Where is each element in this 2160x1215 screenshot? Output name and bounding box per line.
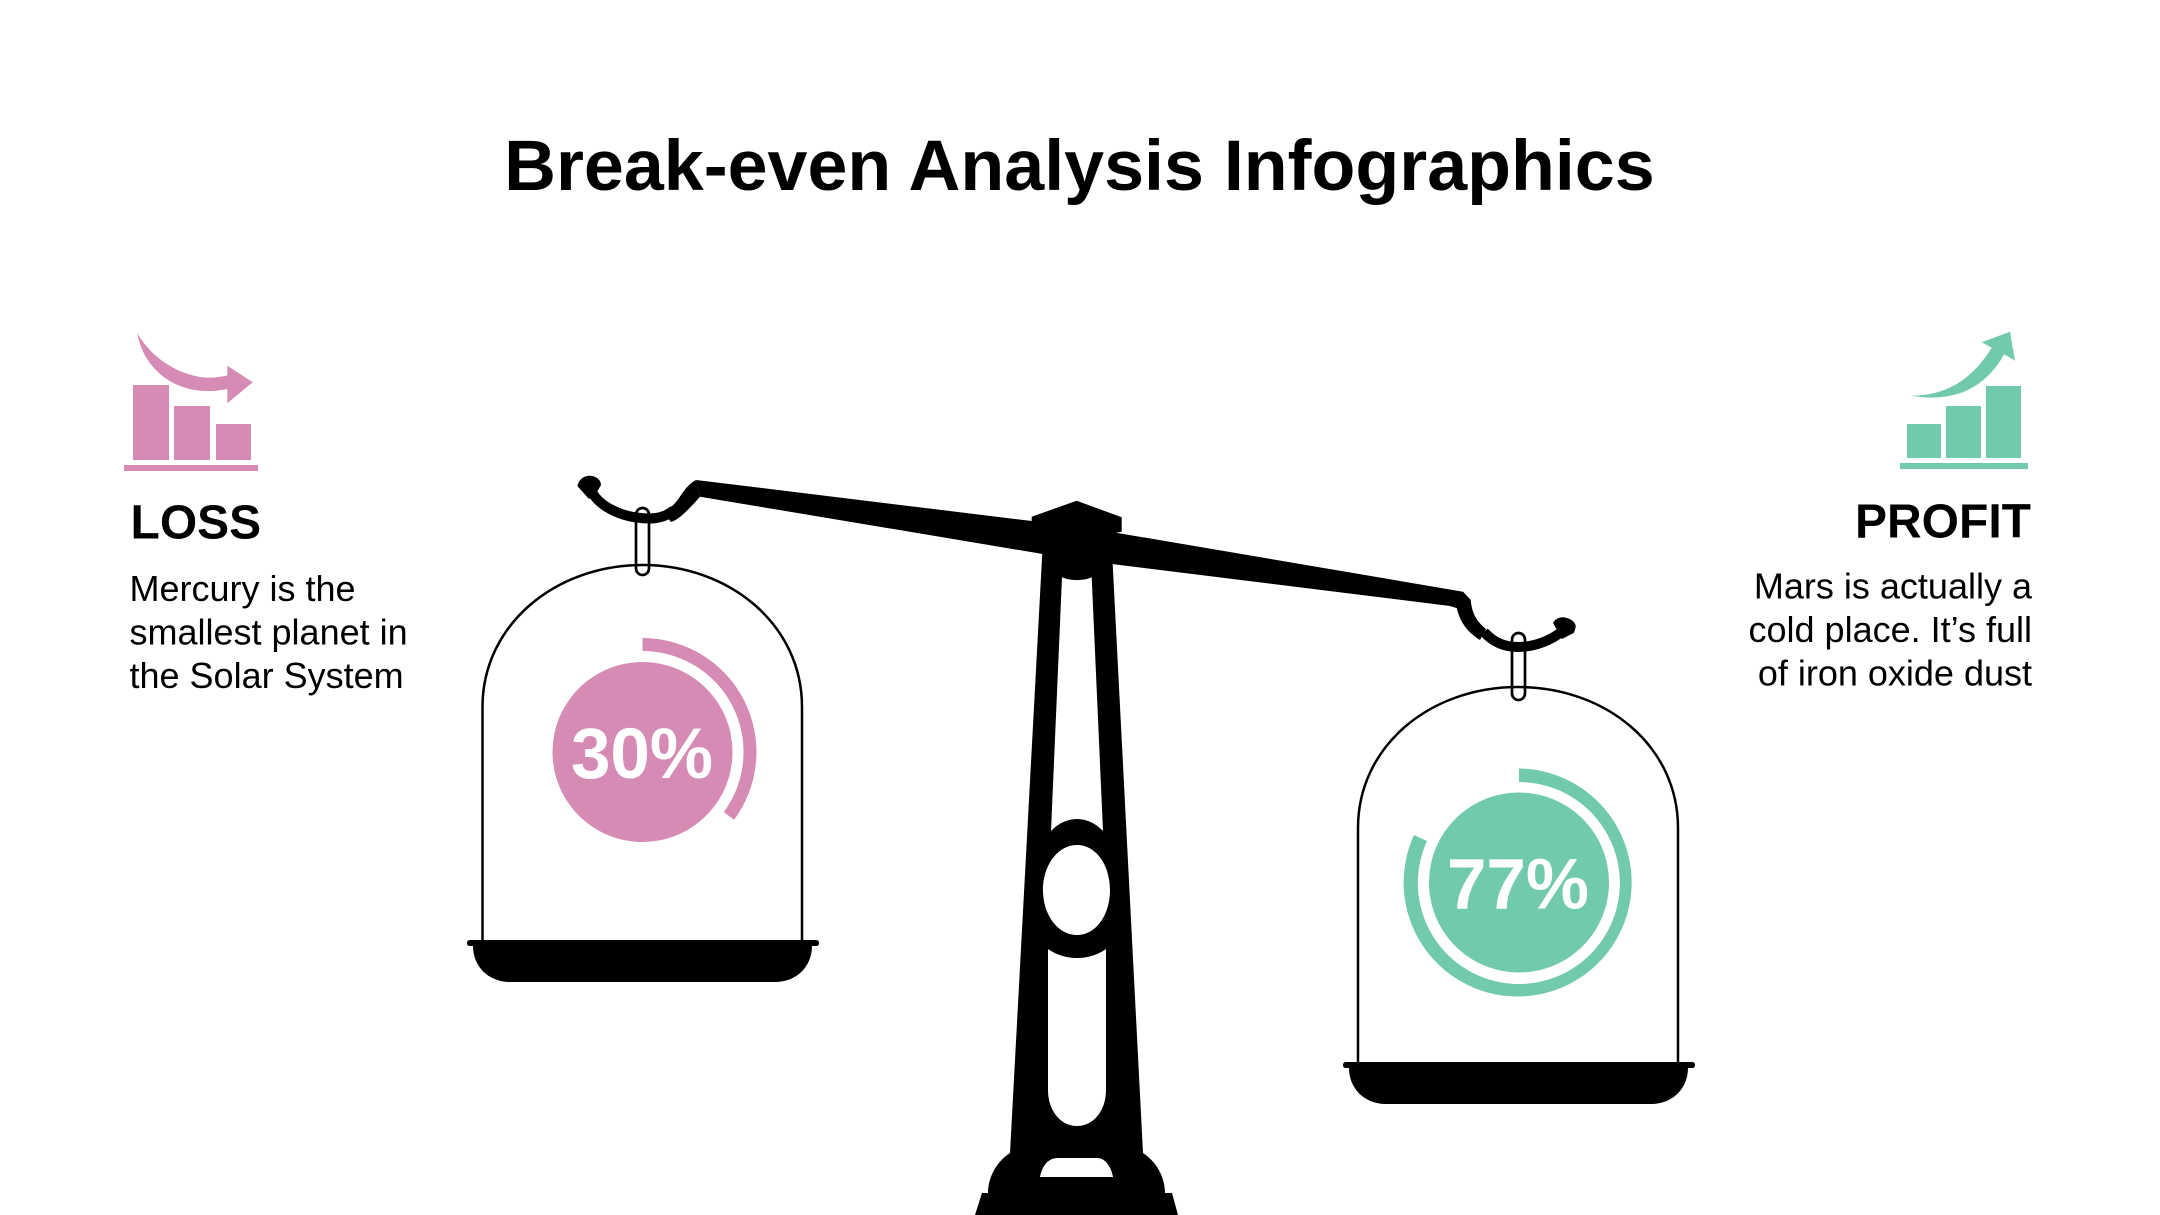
- value: 77%: 77%: [1447, 846, 1589, 924]
- hanging ring: [636, 508, 649, 575]
- left hook: [577, 476, 700, 522]
- text: loss description: the Solar System: [130, 655, 404, 696]
- icon: rising bar chart: [1900, 332, 2028, 469]
- title: Break-even Analysis Infographics: [504, 126, 1655, 206]
- glass dome: [1358, 687, 1678, 1063]
- text: loss description: Mercury is the: [130, 568, 356, 609]
- progress arc: [1404, 768, 1632, 996]
- heading: profit: PROFIT: [1855, 496, 2031, 548]
- panel: loss: [124, 333, 408, 696]
- progress arc: [642, 638, 756, 820]
- value: 30%: 30%: [571, 715, 713, 794]
- pan: [1343, 1062, 1695, 1104]
- panel: right bell jar, 77%: [1343, 633, 1695, 1104]
- text: loss description: smallest planet in: [130, 611, 408, 652]
- text: profit description: of iron oxide dust: [1758, 652, 2032, 694]
- scale column and base: [975, 545, 1178, 1215]
- icon: falling bar chart: [124, 333, 258, 471]
- heading: loss: LOSS: [130, 496, 261, 550]
- panel: left bell jar, 30%: [467, 508, 819, 982]
- beam: [696, 480, 1471, 608]
- glass dome: [482, 565, 802, 941]
- pan: [467, 940, 819, 982]
- text: profit description: [1749, 566, 2033, 694]
- text: profit description: Mars is actually a: [1754, 566, 2033, 606]
- hanging ring: [1512, 633, 1525, 700]
- right hook: [1450, 592, 1576, 647]
- scale beam with hooks: [577, 476, 1576, 647]
- panel: profit: [1749, 332, 2033, 694]
- text: loss description: [130, 568, 408, 696]
- progress circle: [1429, 792, 1609, 972]
- progress circle: [552, 662, 732, 842]
- text: profit description: cold place. It’s full: [1749, 609, 2032, 650]
